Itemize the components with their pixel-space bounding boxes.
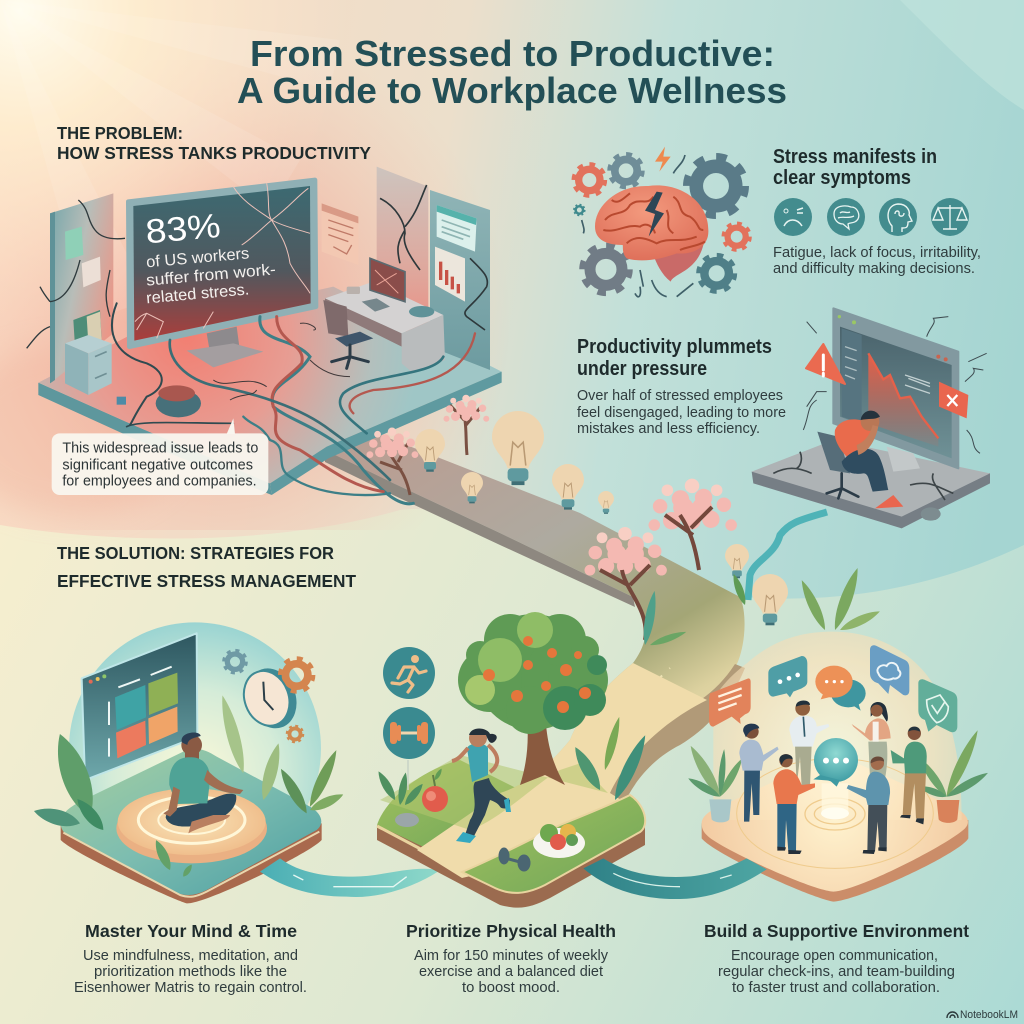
stress cracks around monitor: [803, 317, 987, 453]
glow dome: [69, 622, 321, 874]
text: master your mind and time: Eisenhower Matris to regain control.: [74, 980, 307, 996]
background: upper problem section: [0, 0, 1024, 599]
trailside plants: [570, 566, 882, 803]
big monitor with statistic: suffer from work-: [146, 261, 277, 290]
big monitor with statistic: related stress.: [146, 281, 250, 307]
arrow: path two to three: [583, 858, 767, 899]
right wall with posters: [322, 167, 490, 370]
callout: widespread issue: This widespread issue leads to: [62, 440, 258, 457]
heading: the solution: EFFECTIVE STRESS MANAGEMENT: [57, 571, 356, 591]
text: disengagement: feel disengaged, leading to more: [577, 404, 786, 421]
person in blue sweater: [847, 756, 890, 854]
icon: brain: [827, 198, 865, 236]
text: master your mind and time: [74, 921, 307, 996]
left wall: [27, 193, 125, 383]
text: disengagement: Over half of stressed employees: [577, 387, 783, 404]
heading: the problem: HOW STRESS TANKS PRODUCTIVITY: [57, 143, 371, 163]
heading: productivity plummets: Productivity plummets: [577, 336, 772, 358]
heading: productivity plummets: [577, 336, 772, 380]
person in green sweater: [891, 727, 927, 824]
title: A Guide to Workplace Wellness: [237, 70, 787, 111]
priority matrix screen: [82, 633, 197, 780]
text: prioritize physical health: Prioritize Physical Health: [406, 921, 616, 941]
illustration: brain with gears: [574, 147, 750, 297]
text: build a supportive environment: regular check-ins, and team-building: [718, 964, 955, 980]
chat icons: [709, 645, 957, 732]
person in white shirt: [789, 701, 829, 787]
big monitor with statistic: 83%: [144, 207, 222, 251]
heading: the solution: THE SOLUTION: STRATEGIES FOR: [57, 543, 334, 563]
apple and rock: [375, 760, 448, 827]
text: master your mind and time: prioritization methods like the: [94, 964, 287, 980]
text: prioritize physical health: to boost mood.: [462, 980, 560, 996]
panel: prioritize physical health illustration: [375, 566, 882, 908]
title: From Stressed to Productive:: [250, 33, 775, 74]
text: master your mind and time: Master Your Mind & Time: [85, 921, 297, 941]
arrow: path one to two: [260, 858, 440, 897]
fallen warning piece: [875, 495, 903, 508]
stream to upper right platform: [748, 512, 827, 600]
text: disengagement: mistakes and less efficiency.: [577, 420, 760, 437]
illustration: overwhelmed worker at monitor: [752, 308, 990, 528]
cracked slab: [752, 440, 990, 528]
platform base: [377, 760, 645, 908]
person in blue grey shirt: [739, 724, 779, 822]
blossom trees: [366, 395, 737, 640]
heading: the problem: THE PROBLEM:: [57, 123, 183, 143]
central chat bubble: [813, 738, 858, 787]
dumbbell on ground: [499, 848, 530, 871]
heading: stress manifests: clear symptoms: [773, 167, 911, 189]
illustration: cracked stressed office: [27, 167, 502, 504]
callout: widespread issue: for employees and companies.: [62, 473, 257, 490]
meditating person: [163, 733, 243, 833]
logo: NotebookLM: NotebookLM: [960, 1009, 1018, 1021]
icon: irritated face: [774, 198, 812, 236]
clock and gears: [224, 650, 313, 742]
icon: dumbbell: [383, 707, 435, 759]
text: symptoms: [773, 244, 981, 277]
cream trail: [417, 663, 707, 878]
stressed person in chair: [817, 411, 888, 498]
brain: [595, 185, 708, 282]
gears around brain: [574, 147, 750, 297]
glowing dome: [713, 632, 962, 820]
heading: productivity plummets: under pressure: [577, 358, 707, 380]
text: master your mind and time: Use mindfulness, meditation, and: [83, 948, 298, 964]
text: disengagement: [577, 387, 786, 437]
lower garden: [462, 795, 645, 893]
text: build a supportive environment: [704, 921, 969, 996]
text: build a supportive environment: Build a Supportive Environment: [704, 921, 969, 941]
error box: [939, 382, 968, 418]
meditation disc: [116, 788, 267, 863]
callout: widespread issue: [52, 418, 268, 495]
file cabinet and books: [65, 310, 112, 395]
small desk with monitor and chair: [323, 258, 445, 373]
icon: head profile: [879, 198, 917, 236]
warning triangle: [806, 344, 845, 384]
title: [237, 33, 787, 111]
heading: the problem: [57, 123, 371, 163]
path from stress to wellness: [325, 428, 745, 880]
panel: master your mind and time illustration: [32, 622, 345, 903]
big monitor with statistic: [128, 180, 316, 367]
panel: build a supportive environment illustration: [686, 632, 990, 902]
heading: stress manifests: [773, 146, 937, 189]
icon: runner: [383, 647, 435, 699]
plants: [32, 694, 345, 878]
person in orange sweater: [773, 754, 815, 854]
monitor with falling chart: [833, 308, 958, 472]
tangled cables: [112, 303, 475, 504]
text: build a supportive environment: to faster trust and collaboration.: [732, 980, 940, 996]
callout: widespread issue: significant negative outcomes: [62, 456, 253, 473]
heading: the solution: [57, 543, 356, 591]
light beam: [821, 783, 849, 819]
floor rings: [737, 758, 933, 868]
text: build a supportive environment: Encourage open communication,: [731, 948, 938, 964]
fruit tree: [458, 612, 608, 785]
text: symptoms: Fatigue, lack of focus, irritability,: [773, 244, 981, 261]
broken device on floor: [117, 385, 201, 417]
heading: stress manifests: Stress manifests in: [773, 146, 937, 168]
text: prioritize physical health: Aim for 150 minutes of weekly: [414, 948, 609, 964]
text: symptoms: and difficulty making decisions.: [773, 260, 975, 277]
potted plants: [686, 728, 990, 823]
text: prioritize physical health: [406, 921, 616, 996]
office floor platform: [38, 287, 502, 495]
text: prioritize physical health: exercise and a balanced diet: [419, 964, 603, 980]
island platform: [61, 749, 322, 903]
lightbulbs along the path: [415, 411, 788, 625]
woman in peach jacket: [852, 702, 891, 778]
big monitor with statistic: of US workers: [146, 245, 250, 271]
salad bowl: [533, 824, 585, 858]
icon: balance scale: [931, 198, 969, 236]
rounded platform: [702, 757, 968, 902]
running woman: [452, 728, 511, 843]
floor cracks: [213, 323, 350, 400]
